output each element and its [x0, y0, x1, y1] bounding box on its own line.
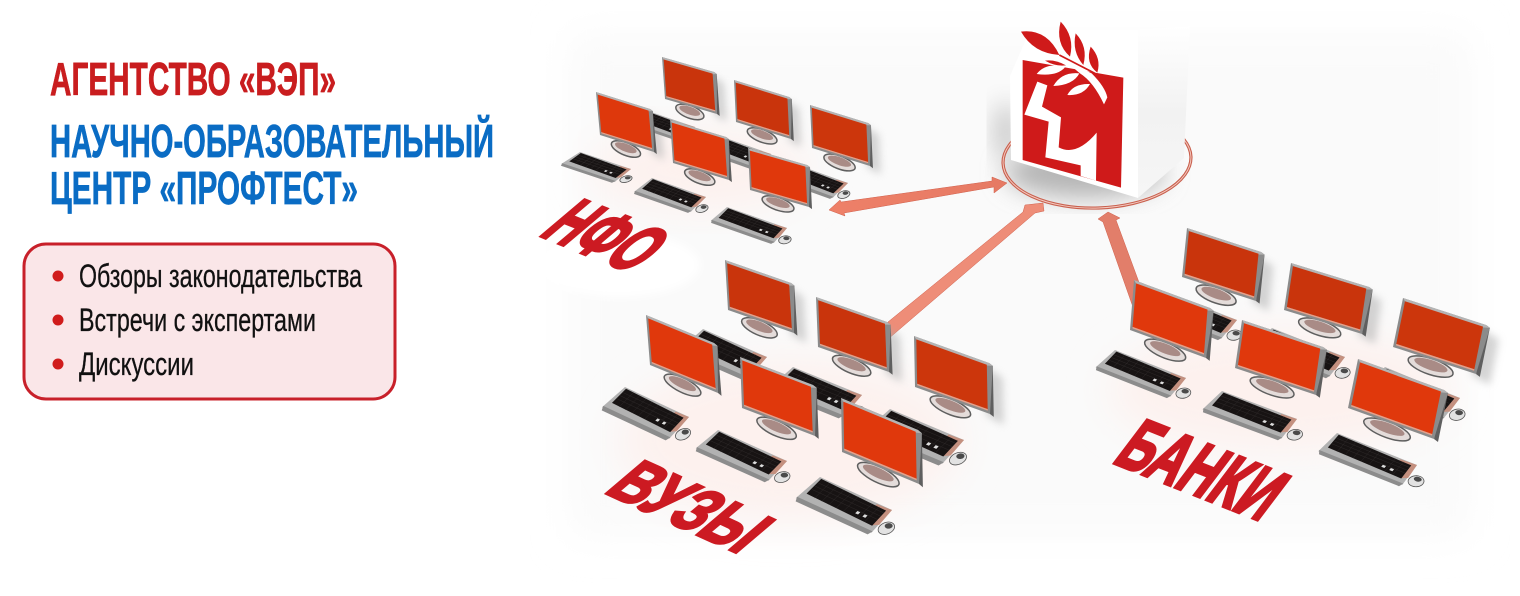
workstation group: ВУЗЫ [600, 260, 1004, 541]
arrow: БАНКИ to hub [1098, 212, 1140, 310]
label: ВУЗЫ: ВУЗЫ [591, 450, 789, 565]
central hub: cube with logo on ring [994, 22, 1193, 211]
list item: expert meetings [52, 302, 316, 338]
list item: discussions: Дискуссии [79, 346, 194, 382]
workstation group: НФО [559, 57, 881, 248]
icon: red logo with olive branch [1021, 22, 1123, 188]
title: agency name: АГЕНТСТВО «ВЭП» [50, 53, 336, 105]
panel: activities list [24, 244, 395, 399]
workstation group: БАНКИ [1094, 228, 1500, 493]
list item: expert meetings: Встречи с экспертами [79, 302, 316, 338]
list item: legislation reviews: Обзоры законодательства [79, 258, 362, 294]
list item: discussions [52, 346, 194, 382]
label: НФО: НФО [524, 188, 688, 285]
subtitle: research and education centre [50, 115, 494, 214]
subtitle: research and education centre: НАУЧНО-ОБРАЗОВАТЕЛЬНЫЙ [50, 115, 494, 167]
arrow: НФО to hub (two-way) [829, 177, 1007, 216]
arrow: ВУЗЫ to hub [887, 203, 1044, 340]
subtitle: research and education centre: ЦЕНТР «ПРОФТЕСТ» [50, 162, 358, 214]
label: БАНКИ: БАНКИ [1100, 406, 1304, 535]
background: soft grey image area [540, 35, 1470, 535]
list item: legislation reviews [52, 258, 362, 294]
